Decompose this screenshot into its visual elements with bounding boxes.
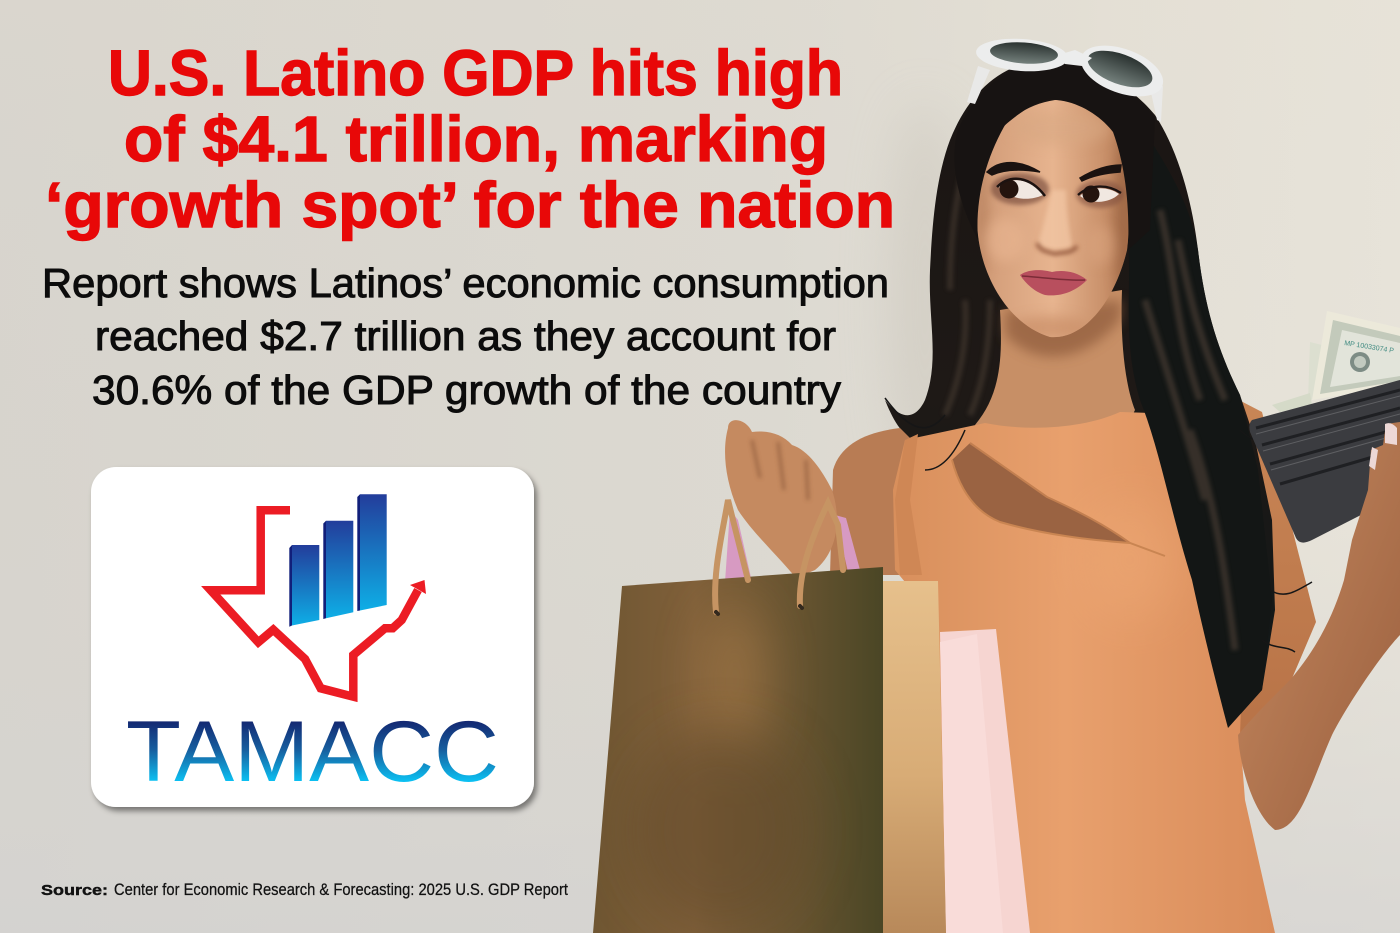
fingernails	[1369, 423, 1397, 470]
dollar bills	[1272, 311, 1400, 412]
subheading: reached $2.7 trillion as they account for	[95, 313, 836, 359]
purple-pink bag handles	[725, 510, 860, 582]
source line: Source:	[41, 882, 108, 899]
neck	[975, 290, 1135, 470]
hair front over dress	[1128, 140, 1272, 728]
headline: U.S. Latino GDP hits high	[108, 37, 843, 109]
wallet	[1249, 380, 1400, 543]
bag handles	[715, 500, 843, 612]
source line: Center for Economic Research & Forecasting: 2025 U.S. GDP Report	[114, 880, 568, 899]
bar chart icon	[289, 494, 387, 627]
left eye	[991, 173, 1049, 205]
left upper arm	[830, 428, 912, 575]
headline	[45, 37, 895, 241]
icon: Texas outline with growth arrow	[211, 510, 426, 697]
bill serial: MP 10033074 P	[1344, 340, 1395, 355]
dress cut-out	[952, 443, 1130, 543]
subheading: Report shows Latinos’ economic consumption	[42, 260, 889, 306]
eyebrows	[987, 163, 1121, 181]
subheading	[42, 260, 889, 413]
left fist	[725, 420, 837, 578]
gold bag front	[593, 567, 883, 933]
pink shopping bag	[940, 629, 1030, 933]
headline: of $4.1 trillion, marking	[124, 103, 828, 175]
photo: woman with shopping bags and wallet	[593, 36, 1400, 933]
upper arm behind wallet	[1230, 398, 1316, 735]
lips	[1020, 270, 1087, 295]
gold bag side	[883, 581, 946, 933]
sunglasses	[967, 36, 1170, 122]
dress	[893, 412, 1275, 933]
right eye	[1076, 180, 1124, 208]
subheading: 30.6% of the GDP growth of the country	[92, 367, 842, 413]
panel: TAMACC logo card	[91, 467, 534, 807]
headline: ‘growth spot’ for the nation	[45, 169, 895, 241]
hair top over forehead	[954, 62, 1155, 250]
logo wordmark: TAMACC	[126, 704, 499, 800]
face	[976, 100, 1134, 340]
hair back mass	[885, 60, 1275, 728]
right hand and forearm	[1238, 422, 1400, 830]
nose shadow	[1037, 243, 1077, 254]
